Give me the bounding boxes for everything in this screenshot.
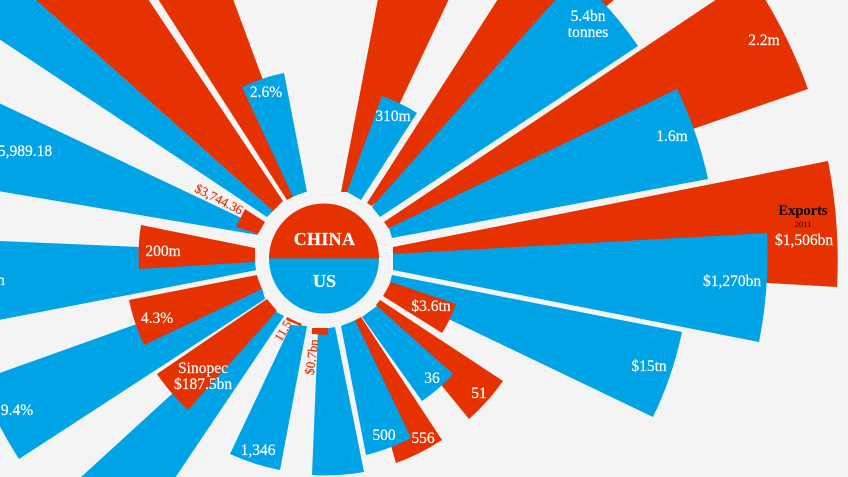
wedge: red 200m [138,225,255,269]
label: 11.5: 11.5 [272,318,294,344]
exports heading: Exports [778,203,828,219]
wedge: red 2.2m: 2.2m [748,32,780,49]
wedge: red 200m: 200m [145,243,181,260]
wedge: blue bottom, no label [312,327,364,475]
wedge: blue 1.6m [389,89,708,238]
wedge: red Sinopec $187.5bn [157,299,277,410]
wedge: red $3.6tn: $3.6tn [411,298,451,315]
wedge: red exports $1,506bn: $1,506bn [775,232,833,249]
wedge: blue 1,346 [230,325,307,470]
wedge: red 556 [355,317,442,463]
wedge: red 11.5 [286,317,302,326]
label: $0.7bn: $0.7bn [302,338,322,376]
wedge: blue $1,270bn: $1,270bn [703,273,761,290]
wedge: red top-left large [35,0,283,211]
wedge: red 51: 51 [471,385,487,402]
centre disc: China half [269,203,379,258]
wedge: blue 9.4% [0,280,265,459]
wedge: blue 5,989.18 [0,94,258,235]
wedge: blue 1,346: 1,346 [241,442,276,459]
centre disc: US half [269,258,379,314]
wedge: red behind 5.4bn [367,0,615,206]
wedge: red $0.7bn [312,328,328,335]
wedge: blue 500 [341,320,411,455]
label: $3,744.36: $3,744.36 [192,181,246,218]
wedge: blue 2.6% [242,73,307,197]
wedge: blue top-left [0,0,273,217]
wedge: blue 2.6%: 2.6% [250,84,282,101]
wedge: red Sinopec $187.5bn: $187.5bn [174,376,232,393]
wedge: blue 36: 36 [424,370,440,387]
wedge: blue 310m [347,96,417,200]
wedge: red exports $1,506bn [393,161,838,287]
wedge: red top-right, no label [341,0,449,192]
wedge: blue $15tn [388,275,682,417]
wedge: blue 9.4%: 9.4% [1,402,33,419]
wedge: blue 1.6m: 1.6m [656,128,688,145]
label: 556: 556 [411,430,435,447]
wedge: blue 36 [362,306,453,401]
wedge: blue $1,270bn [393,233,768,342]
exports heading: 2011 [795,219,811,229]
wedge: blue 5.4bn tonnes: 5.4bn [571,8,606,25]
wedge: blue lower-left behind Sinopec [80,307,284,477]
wedge: red Sinopec $187.5bn: Sinopec [178,360,228,377]
wedge: blue left, cropped label [0,241,257,320]
wedge: red 51 [376,300,503,419]
exports heading [778,203,828,229]
wedge: red 4.3% [129,275,262,345]
wedge: red $3.6tn [383,282,456,333]
wedge: red top-left narrow [158,0,300,200]
wedge: blue 500: 500 [372,427,396,444]
wedge: red 2.2m [384,0,808,233]
centre disc: China half: CHINA [294,229,355,249]
wedge: red 4.3%: 4.3% [141,310,173,327]
wedge: blue 5.4bn tonnes: tonnes [568,24,608,41]
centre disc: US half: US [313,271,336,291]
wedge: blue $15tn: $15tn [631,358,667,375]
wedge: red $3,744.36 [236,209,265,234]
centre ring [255,190,393,328]
wedge: blue 5.4bn tonnes [372,0,638,217]
wedge: blue 310m: 310m [375,108,411,125]
